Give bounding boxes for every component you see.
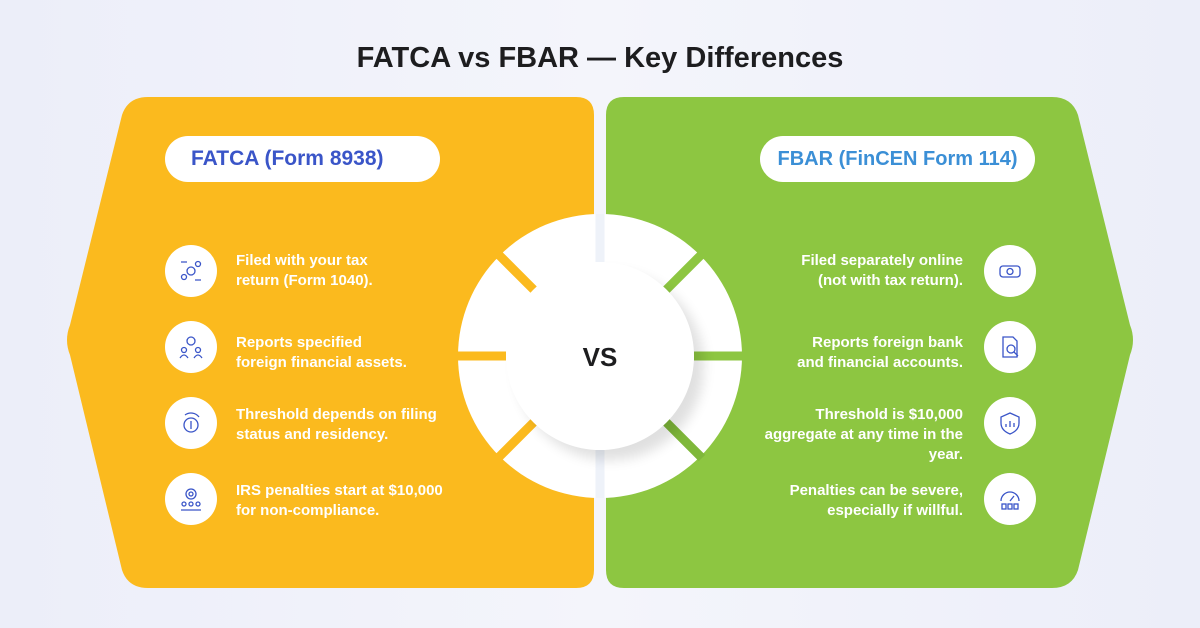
- heading: FATCA pill: [165, 136, 440, 182]
- text: left 3: [236, 406, 437, 443]
- text: right 4: especially if willful.: [827, 502, 963, 519]
- text: left 4: IRS penalties start at $10,000: [236, 482, 443, 499]
- icon: left 1: [165, 245, 217, 297]
- text: right 3: year.: [929, 446, 963, 463]
- text: left 3: Threshold depends on filing: [236, 406, 437, 423]
- text: left 4: for non-compliance.: [236, 502, 379, 519]
- text: left 2: Reports specified: [236, 334, 362, 351]
- text: left 1: return (Form 1040).: [236, 272, 373, 289]
- heading: FATCA pill: FATCA (Form 8938): [191, 147, 384, 170]
- text: left 2: [236, 334, 407, 371]
- text: right 4: Penalties can be severe,: [790, 482, 963, 499]
- panel: FATCA: [67, 97, 594, 588]
- text: right 3: [765, 406, 963, 463]
- icon: right 3: [984, 397, 1036, 449]
- text: left 1: [236, 252, 373, 289]
- text: left 2: foreign financial assets.: [236, 354, 407, 371]
- text: left 1: Filed with your tax: [236, 252, 368, 269]
- text: right 2: [797, 334, 963, 371]
- icon: left 2: [165, 321, 217, 373]
- text: left 3: status and residency.: [236, 426, 388, 443]
- text: right 4: [790, 482, 963, 519]
- center circle: [458, 214, 742, 498]
- icon: right 1: [984, 245, 1036, 297]
- icon: left 3: [165, 397, 217, 449]
- text: right 3: Threshold is $10,000: [815, 406, 963, 423]
- heading: FBAR pill: [760, 136, 1035, 182]
- text: right 1: (not with tax return).: [818, 272, 963, 289]
- text: right 2: and financial accounts.: [797, 354, 963, 371]
- text: right 1: [801, 252, 963, 289]
- text: right 2: Reports foreign bank: [812, 334, 963, 351]
- text: right 3: aggregate at any time in the: [765, 426, 963, 443]
- icon: right 4: [984, 473, 1036, 525]
- text: left 4: [236, 482, 443, 519]
- title: FATCA vs FBAR — Key Differences: [357, 42, 843, 74]
- heading: FBAR pill: FBAR (FinCEN Form 114): [777, 148, 1018, 170]
- center circle: VS: [583, 342, 617, 372]
- text: right 1: Filed separately online: [801, 252, 963, 269]
- icon: right 2: [984, 321, 1036, 373]
- panel: FBAR: [606, 97, 1133, 588]
- icon: left 4: [165, 473, 217, 525]
